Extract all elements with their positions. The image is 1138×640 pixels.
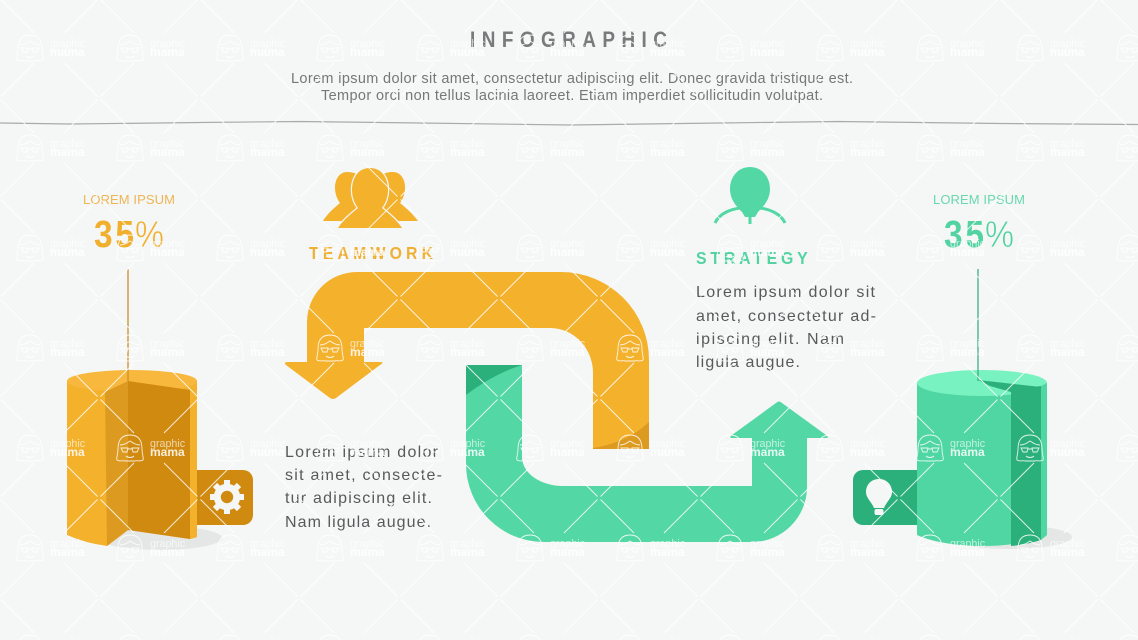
stat value right: % (985, 214, 1014, 255)
orange cylinder (67, 370, 197, 546)
intro text: Lorem ipsum dolor sit amet, consectetur adipiscing elit. Donec gravida tristique est. (291, 71, 853, 87)
shadow left (98, 526, 222, 550)
stat value right: 35 (944, 213, 984, 255)
text block: left paragraph: Nam ligula augue. (285, 514, 431, 531)
stat value left: 35 (94, 213, 134, 255)
connector line left (127, 269, 129, 381)
connector line right (977, 269, 979, 381)
text block: left paragraph (285, 444, 442, 531)
panel: strategy (696, 167, 876, 371)
stat label left: LOREM IPSUM (83, 192, 175, 207)
green arrow (466, 365, 828, 542)
stat value left: % (135, 214, 164, 255)
heading: strategy: STRATEGY (696, 248, 808, 268)
panel: teamwork (309, 168, 434, 263)
text block: right paragraph: amet, consectetur ad- (696, 308, 876, 325)
stat value right (944, 213, 1014, 255)
text block: left paragraph: sit amet, consecte- (285, 467, 442, 484)
orange arrow (285, 272, 649, 449)
stat label right: LOREM IPSUM (933, 192, 1025, 207)
text block: right paragraph: Lorem ipsum dolor sit (696, 284, 876, 301)
text block: left paragraph: tur adipiscing elit. (285, 490, 432, 507)
title: INFOGRAPHIC (470, 28, 667, 52)
text block: left paragraph: Lorem ipsum dolor (285, 444, 439, 461)
text block: right paragraph (696, 284, 876, 371)
icon: team (323, 168, 418, 228)
icon: gear (210, 480, 244, 514)
icon: strategy person (715, 167, 785, 224)
panel: left cylinder stat (67, 192, 253, 550)
panel: right cylinder stat (853, 192, 1072, 549)
green cylinder (917, 370, 1047, 546)
stat value left (94, 213, 164, 255)
heading: teamwork: TEAMWORK (309, 243, 434, 263)
icon: light bulb (866, 479, 892, 515)
text block: right paragraph: ligula augue. (696, 354, 800, 371)
text block: right paragraph: ipiscing elit. Nam (696, 331, 844, 348)
intro text (291, 71, 853, 104)
tab with bulb icon (853, 470, 925, 525)
intro text: Tempor orci non tellus lacinia laoreet. Etiam imperdiet sollicitudin volutpat. (321, 88, 823, 104)
shadow right (948, 525, 1072, 549)
tab with gear icon (190, 470, 253, 525)
